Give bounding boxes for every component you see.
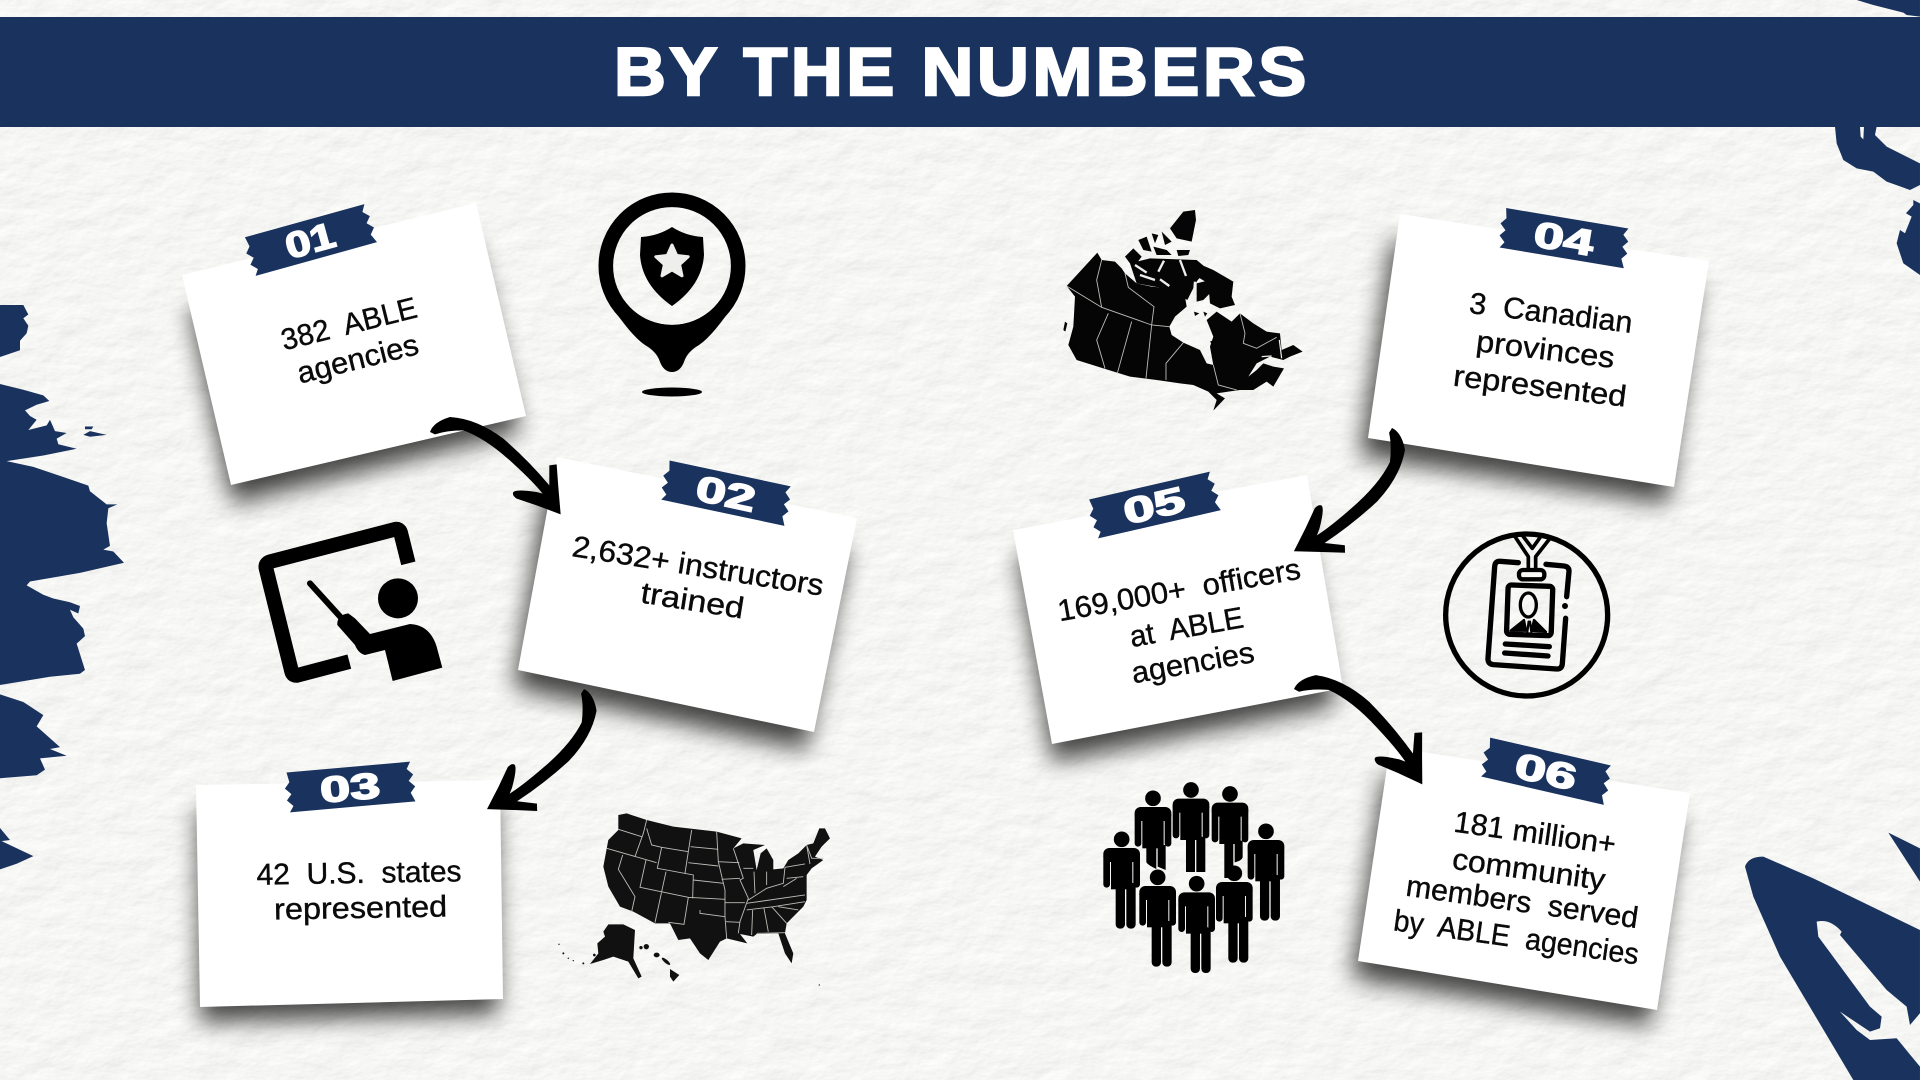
card 04 text [1452,286,1637,414]
card 01 [182,203,526,504]
card 04 [1360,208,1709,504]
header banner [0,17,1920,127]
card 02 text: trained [639,577,746,625]
card 01 text [278,292,429,392]
tab 02: 02 [692,467,760,520]
card 02 [514,457,857,750]
arrow: card 05 to 06 [1287,674,1430,784]
card 04 text: 3 Canadian [1468,287,1634,340]
card 05 text: agencies [1129,636,1257,690]
card 05 [1013,471,1343,762]
icon: map of Canada [1063,210,1303,411]
card 03 text: represented [274,890,447,926]
brush stroke: left edge [0,305,124,869]
arrow: card 02 to 03 [487,679,599,821]
card 06 text: members served [1404,870,1640,935]
card 06 text: community [1450,843,1607,897]
card 06 text: by ABLE agencies [1392,904,1641,971]
brush stroke: top right [1835,0,1920,275]
tab 05: 05 [1119,479,1189,532]
card 03 text: 42 U.S. states [256,855,462,892]
brush stroke: bottom right [1745,833,1920,1080]
card 03 [196,761,503,1022]
card 05 text [1055,553,1316,701]
card 06 text [1392,799,1656,971]
card 04 text: provinces [1474,325,1616,375]
icon: group of people [1103,782,1284,973]
card 04 text: represented [1452,360,1628,414]
title: BY THE NUMBERS [614,34,1310,110]
card 01 text: 382 ABLE [278,292,421,357]
tab 05 [1086,471,1222,540]
arrow: card 04 to 05 [1294,419,1407,562]
arrow: card 01 to 02 [430,417,561,514]
icon: police location pin [606,200,738,396]
card 05 text: at ABLE [1127,602,1246,654]
tab 02 [658,460,794,527]
card 06 [1352,737,1690,1026]
card 03 text [256,855,462,927]
card 05 text: 169,000+ officers [1055,553,1303,628]
card 02 text [564,530,826,637]
card 01 text: agencies [294,328,422,390]
tab 06 [1478,737,1614,806]
tab 04 [1496,208,1631,269]
tab 04: 04 [1531,213,1597,264]
tab 01 [242,203,378,278]
icon: ID badge in circle [1446,534,1608,696]
tab 03: 03 [318,764,382,811]
card 02 text: 2,632+ instructors [570,530,826,603]
card 06 text: 181 million+ [1452,806,1618,861]
tab 06: 06 [1511,745,1581,798]
icon: map of United States [558,813,830,986]
icon: teacher at board [266,529,442,681]
tab 01: 01 [281,214,340,267]
tab 03 [284,761,417,814]
